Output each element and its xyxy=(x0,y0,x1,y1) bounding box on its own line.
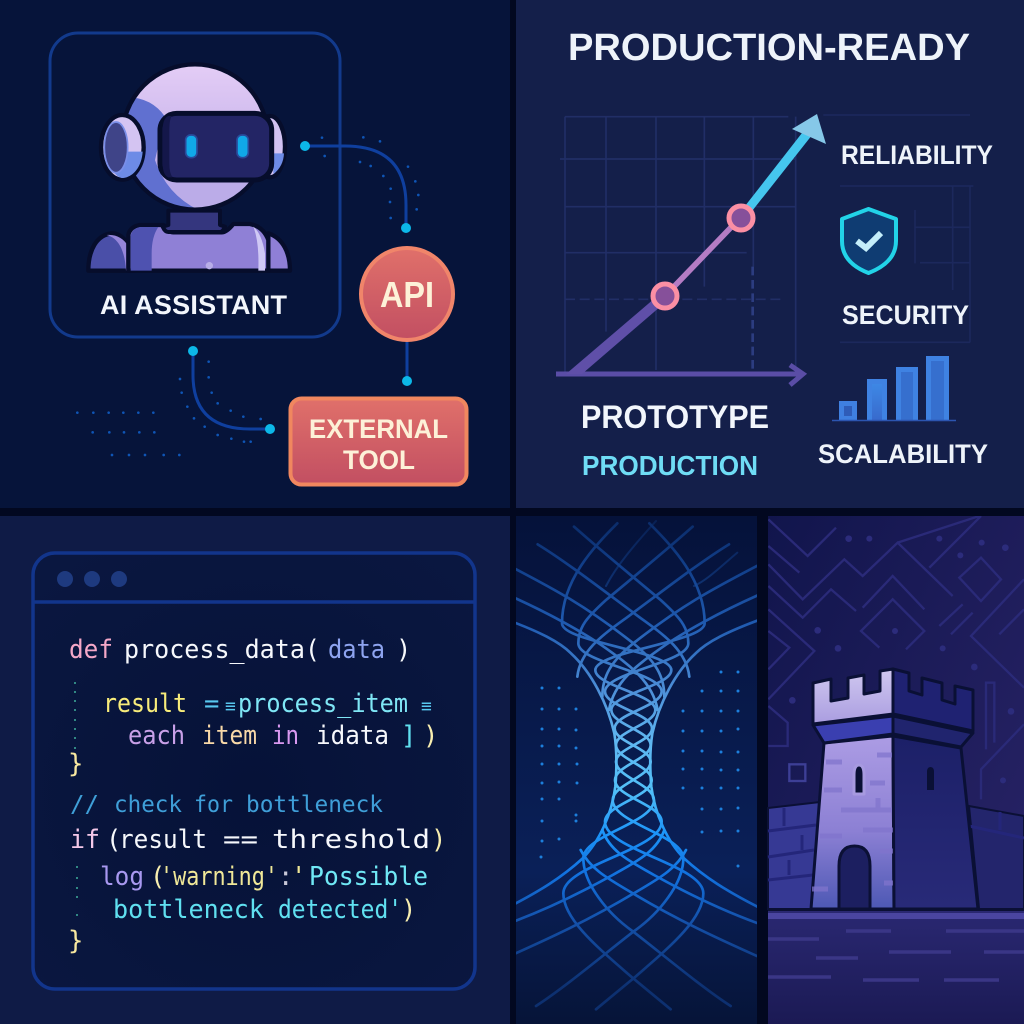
code block: result xyxy=(119,825,207,855)
external tool box: EXTERNAL xyxy=(309,414,448,444)
wormhole lattice xyxy=(506,521,761,1009)
code block: process_data( xyxy=(124,635,320,665)
API badge xyxy=(361,248,453,340)
API badge: API xyxy=(380,274,434,315)
code block: each xyxy=(128,721,185,751)
icon: shield xyxy=(842,209,896,273)
code block: ( xyxy=(150,862,165,892)
ground xyxy=(768,908,1024,1024)
code block: detected' xyxy=(278,895,402,925)
code block: == xyxy=(223,825,258,855)
connector: assistant to API xyxy=(305,146,406,228)
code block: ) xyxy=(431,825,446,855)
code block: } xyxy=(68,749,83,779)
code block: threshold xyxy=(272,825,430,855)
code block: def xyxy=(69,635,113,665)
connector nodes xyxy=(188,141,412,434)
panel: code editor xyxy=(0,516,510,1024)
tower body xyxy=(811,736,978,909)
panel: wormhole bottleneck xyxy=(506,516,761,1024)
code block: ' xyxy=(291,862,306,892)
code block: process_item xyxy=(238,689,408,719)
brick details xyxy=(812,755,893,889)
code block: 'warning' xyxy=(160,862,278,892)
panel: castle tower xyxy=(768,516,1024,1024)
code block: ] xyxy=(401,721,416,751)
title bar xyxy=(34,571,474,602)
code block: : xyxy=(278,862,293,892)
external tool box xyxy=(290,398,466,484)
background circuit pattern xyxy=(768,516,1024,799)
code block: bottleneck xyxy=(246,792,383,818)
particle dots xyxy=(541,672,738,866)
code block: ≡ xyxy=(421,696,432,717)
code block: ) xyxy=(401,895,416,925)
x axis arrow xyxy=(556,365,803,385)
code block: ( xyxy=(106,825,121,855)
assistant frame xyxy=(50,33,340,337)
connector: API to external tool xyxy=(406,340,408,381)
label: reliability: RELIABILITY xyxy=(841,140,993,170)
code block: = xyxy=(204,689,219,719)
code block: result xyxy=(103,689,187,719)
heading: production-ready: PRODUCTION-READY xyxy=(568,27,970,69)
code block: ≡ xyxy=(225,696,236,717)
code block: Possible xyxy=(309,862,428,892)
chart grid xyxy=(560,115,973,372)
indent dots xyxy=(75,683,77,915)
connector: external tool to assistant xyxy=(193,351,270,429)
milestone markers xyxy=(653,206,753,308)
right-handed strands (mirror) xyxy=(562,523,761,1009)
tower battlements xyxy=(813,669,973,747)
arrow head xyxy=(792,114,826,144)
code block: ) xyxy=(423,721,438,751)
chart: scalability bars xyxy=(832,356,956,420)
growth line xyxy=(566,124,816,374)
code block: if xyxy=(70,825,100,855)
code block: bottleneck xyxy=(113,895,264,925)
heading: AI assistant: AI ASSISTANT xyxy=(100,290,288,320)
code block: check xyxy=(114,792,182,818)
castle wall xyxy=(768,802,1024,909)
label: security: SECURITY xyxy=(842,300,969,330)
code block: } xyxy=(68,926,83,956)
label: scalability: SCALABILITY xyxy=(818,439,988,469)
code block: data xyxy=(328,635,385,665)
icon: robot xyxy=(88,64,290,271)
code block: in xyxy=(272,721,299,751)
tower windows xyxy=(854,765,934,794)
code block: idata xyxy=(316,721,389,751)
editor window xyxy=(33,553,475,989)
code block: ) xyxy=(396,635,411,665)
decorative dots xyxy=(77,137,418,455)
left-handed strands xyxy=(506,521,705,1009)
tower door xyxy=(839,846,870,909)
code block: for xyxy=(194,792,233,818)
label: production: PRODUCTION xyxy=(582,450,758,481)
code block: item xyxy=(202,721,257,751)
external tool box: TOOL xyxy=(343,445,415,475)
panel: AI assistant and external tool xyxy=(0,0,510,508)
label: prototype: PROTOTYPE xyxy=(581,399,769,435)
code block xyxy=(68,635,446,956)
code block: // xyxy=(70,792,99,818)
code block: log xyxy=(100,862,144,892)
panel: production-ready xyxy=(516,0,1024,508)
